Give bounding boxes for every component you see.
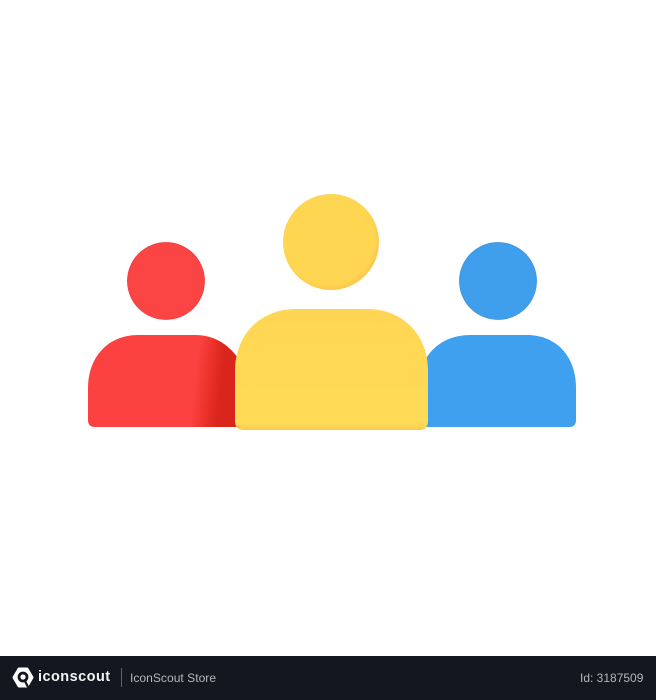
person: yellow — [235, 194, 428, 430]
yellow body — [235, 309, 428, 430]
store name: IconScout Store — [130, 671, 216, 685]
person: blue — [425, 242, 576, 427]
person: red — [88, 242, 238, 427]
blue head — [460, 242, 536, 320]
asset id: Id: 3187509 — [580, 671, 643, 685]
brand name: iconscout — [38, 669, 111, 685]
divider — [121, 668, 122, 687]
yellow head — [283, 194, 379, 290]
blue body — [425, 335, 576, 427]
icon: iconscout logo — [12, 668, 34, 688]
footer bar — [0, 656, 656, 700]
red head — [128, 242, 204, 320]
red body — [88, 335, 238, 427]
